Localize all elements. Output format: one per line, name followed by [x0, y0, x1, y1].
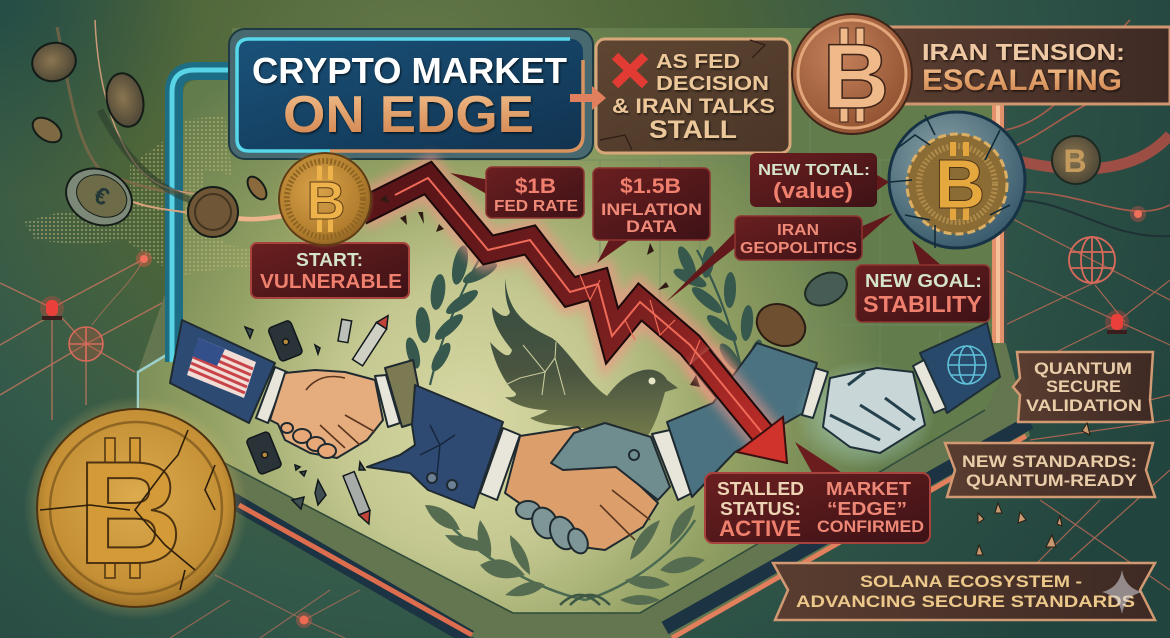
- callout: new total: (value): [773, 178, 853, 203]
- right robot handshake: [802, 323, 1000, 453]
- banner: quantum secure validation: VALIDATION: [1026, 396, 1142, 415]
- center handshake: [480, 343, 817, 557]
- banner: solana ecosystem: ADVANCING SECURE STANDARDS: [796, 592, 1135, 611]
- title line 1: CRYPTO MARKET: [252, 50, 567, 91]
- cracked sphere coin: [889, 112, 1025, 248]
- callout: stalled status and market edge: [705, 442, 930, 543]
- coin 1: [28, 38, 80, 86]
- laurel sprig right: [671, 244, 765, 385]
- subtitle text: AS FED: [656, 51, 740, 73]
- cuff: [480, 428, 520, 500]
- hand: [505, 427, 658, 550]
- callout: $1B: FED RATE: [494, 198, 578, 215]
- coin 5: [188, 187, 238, 237]
- torn sleeve: [385, 360, 425, 427]
- bitcoin coin: start: B: [306, 171, 346, 231]
- panel background: [138, 28, 1000, 613]
- robot hand: [823, 368, 925, 453]
- callout: $1B: [450, 167, 584, 218]
- banner: quantum secure validation: SECURE: [1046, 377, 1121, 396]
- callout: $1.5B: DATA: [626, 217, 677, 236]
- big cracked bitcoin: [24, 396, 248, 620]
- hand: [270, 370, 383, 458]
- swooshes left: [57, 20, 282, 219]
- coin 4: €: [90, 181, 113, 212]
- barrels and missiles: [245, 312, 393, 526]
- callout: $1.5B: INFLATION: [601, 200, 702, 219]
- globe node left: [69, 327, 103, 361]
- robot thumb: [551, 423, 670, 500]
- callout: iran geopolitics: IRAN: [777, 222, 819, 239]
- grid lines: [430, 100, 1000, 470]
- dove: [490, 278, 678, 437]
- icon: globe: [948, 346, 986, 384]
- callout: iran geopolitics: [666, 213, 893, 302]
- arrow overlay: [700, 357, 787, 463]
- flag: [187, 338, 256, 398]
- icon: sparkle: [1102, 570, 1142, 614]
- copper bitcoin coin: [792, 14, 912, 134]
- node: [1130, 206, 1146, 222]
- callout: stalled status and market edge: ACTIVE: [719, 516, 801, 541]
- banner: quantum secure validation: QUANTUM: [1034, 359, 1132, 378]
- cracked sphere coin: B: [935, 145, 985, 223]
- arrow: title to subtitle: [570, 86, 606, 110]
- globe wireframe: [1069, 237, 1115, 283]
- iran tension banner: [880, 27, 1170, 104]
- chart: falling red line: [360, 178, 768, 440]
- banner: new standards: QUANTUM-READY: [966, 471, 1138, 490]
- small coin right: [1052, 136, 1100, 184]
- swooshes right: [1005, 20, 1170, 236]
- callout: new goal: NEW GOAL:: [865, 271, 982, 291]
- banner: new standards: NEW STANDARDS:: [962, 452, 1137, 471]
- callout: start: [251, 243, 409, 298]
- cuff: [256, 367, 287, 423]
- robot cuff: [652, 430, 692, 500]
- network lines: left side: [0, 259, 162, 420]
- callout: new goal: [856, 240, 990, 322]
- icon: red x: [615, 56, 645, 85]
- callout: $1.5B: [593, 168, 710, 263]
- subtitle text: [612, 51, 775, 144]
- orange stripes: [137, 103, 1030, 638]
- beacon right: [1105, 310, 1129, 334]
- barrel 1: [268, 320, 303, 362]
- coin 2: [102, 70, 148, 130]
- iran tension banner: ESCALATING: [922, 64, 1122, 97]
- fingers: [281, 423, 336, 458]
- coin: bronze near handshake: [750, 296, 812, 354]
- network lines: bottom left: [170, 575, 360, 638]
- cracks: [580, 275, 700, 365]
- missile 1: [353, 312, 393, 366]
- callout: stalled status and market edge: “EDGE”: [827, 499, 907, 519]
- coin: teal: [800, 266, 852, 312]
- cuff: [913, 360, 946, 413]
- banner: quantum secure validation: [1013, 352, 1153, 422]
- missile 3: [338, 319, 352, 343]
- barrel 2: [246, 431, 282, 475]
- laurel sprig left: [403, 244, 500, 385]
- subtitle text: DECISION: [656, 73, 769, 95]
- coin 3: [28, 113, 66, 147]
- teal glow: [795, 360, 935, 470]
- neon panel border: [172, 70, 232, 362]
- callout: new total: NEW TOTAL:: [758, 162, 870, 179]
- callout: new total: [750, 153, 889, 207]
- robot sleeve: [667, 343, 817, 497]
- left handshake: [170, 320, 425, 458]
- node left: [136, 251, 152, 267]
- callout: stalled status and market edge: STATUS:: [720, 499, 801, 519]
- sleeve with flag: [170, 320, 275, 423]
- big cracked bitcoin: B: [77, 431, 183, 594]
- banner: solana ecosystem: SOLANA ECOSYSTEM -: [860, 572, 1082, 591]
- coin 4: [57, 158, 141, 236]
- shards: [245, 327, 365, 509]
- callout: start: VULNERABLE: [260, 271, 402, 293]
- callout: stalled status and market edge: CONFIRMED: [817, 517, 924, 536]
- center sleeve: [367, 385, 503, 508]
- missile 2: [343, 472, 374, 526]
- bitcoin coin: start: [275, 149, 375, 249]
- world map dots: [24, 115, 300, 280]
- callout: $1B: $1B: [515, 175, 556, 198]
- node: bottom left: [296, 612, 312, 628]
- coins: flying top left: [28, 38, 270, 237]
- callout: stalled status and market edge: MARKET: [826, 479, 911, 499]
- callout: iran geopolitics: GEOPOLITICS: [740, 240, 857, 257]
- subtitle box: [596, 39, 790, 153]
- callout: start: START:: [296, 250, 363, 270]
- copper bitcoin coin: B: [823, 26, 889, 128]
- title box: [229, 29, 593, 159]
- robot fingers: [516, 501, 592, 557]
- banner: solana ecosystem: [773, 563, 1155, 620]
- callout: $1.5B: $1.5B: [620, 175, 681, 198]
- callout: stalled status and market edge: STALLED: [717, 479, 804, 499]
- coin 6: [244, 173, 270, 203]
- subtitle text: & IRAN TALKS: [612, 95, 775, 118]
- debris: [380, 195, 700, 387]
- small coin right: B: [1063, 143, 1087, 179]
- torn cuff: [375, 375, 400, 427]
- sleeve: [920, 323, 1000, 413]
- beacon left: [40, 296, 64, 320]
- title line 2: ON EDGE: [283, 86, 534, 144]
- callout: new goal: STABILITY: [863, 291, 982, 317]
- laurel wreath bottom: [425, 505, 705, 605]
- banner text: IRAN TENSION:: [922, 39, 1125, 65]
- network lines: right side: [1000, 215, 1170, 600]
- subtitle text: STALL: [649, 116, 737, 144]
- falling fragments: [976, 423, 1090, 555]
- banner: new standards: [945, 443, 1155, 497]
- outer panel band: [138, 100, 1030, 638]
